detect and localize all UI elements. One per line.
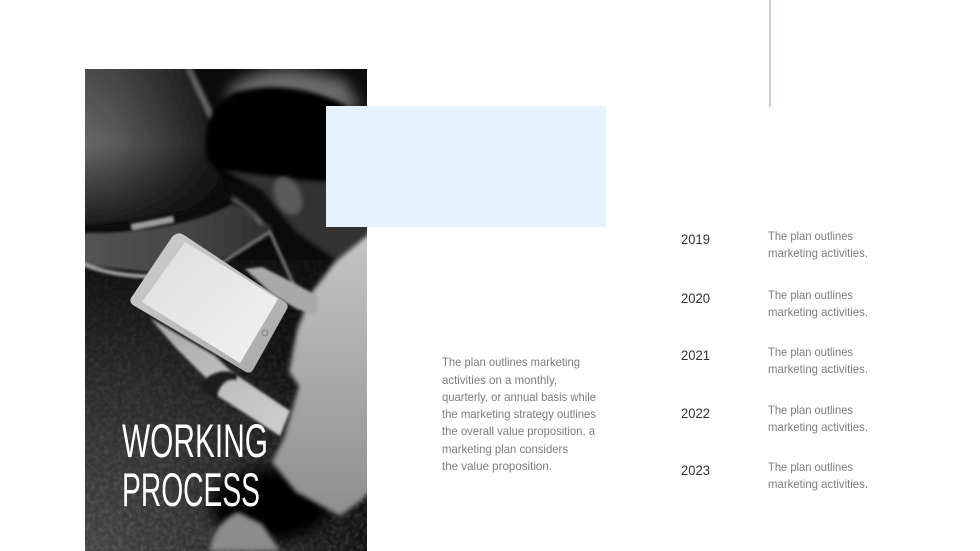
timeline row 2021: marketing activities.: [768, 362, 868, 376]
timeline row 2022: 2022: [681, 405, 710, 421]
timeline row 2021: [681, 345, 868, 376]
timeline row 2023: [681, 460, 868, 491]
light blue rectangle: [326, 106, 606, 227]
description text block: the value proposition.: [442, 459, 552, 473]
description text block: quarterly, or annual basis while: [442, 390, 596, 404]
shirt: [270, 232, 367, 518]
timeline row 2021: 2021: [681, 347, 710, 363]
description text block: activities on a monthly,: [442, 373, 557, 387]
description text block: marketing plan considers: [442, 442, 568, 456]
knee: [210, 512, 280, 551]
timeline row 2019: marketing activities.: [768, 246, 868, 260]
timeline row 2022: marketing activities.: [768, 420, 868, 434]
timeline row 2021: The plan outlines: [768, 345, 853, 359]
description text block: [442, 355, 596, 473]
forearm and wrist: [150, 267, 318, 436]
vertical accent line: [769, 0, 771, 107]
tablet: [130, 233, 288, 373]
timeline row 2019: The plan outlines: [768, 229, 853, 243]
timeline row 2022: The plan outlines: [768, 403, 853, 417]
timeline row 2023: The plan outlines: [768, 460, 853, 474]
timeline row 2020: The plan outlines: [768, 288, 853, 302]
title: [122, 414, 268, 516]
chair seat: [85, 204, 297, 286]
description text block: the marketing strategy outlines: [442, 407, 596, 421]
description text block: the overall value proposition, a: [442, 424, 595, 438]
title: WORKING: [122, 414, 268, 467]
carpet floor: [85, 260, 367, 551]
timeline list: [681, 229, 868, 491]
timeline row 2020: [681, 288, 868, 319]
timeline row 2020: 2020: [681, 290, 710, 306]
timeline row 2023: marketing activities.: [768, 477, 868, 491]
photo: person holding a tablet: [75, 60, 380, 551]
timeline row 2020: marketing activities.: [768, 305, 868, 319]
chair back: [85, 69, 218, 225]
timeline row 2022: [681, 403, 868, 434]
description text block: The plan outlines marketing: [442, 355, 580, 369]
timeline row 2023: 2023: [681, 462, 710, 478]
timeline row 2019: [681, 229, 868, 260]
title: PROCESS: [122, 463, 260, 516]
head: [206, 69, 380, 266]
timeline row 2019: 2019: [681, 231, 710, 247]
